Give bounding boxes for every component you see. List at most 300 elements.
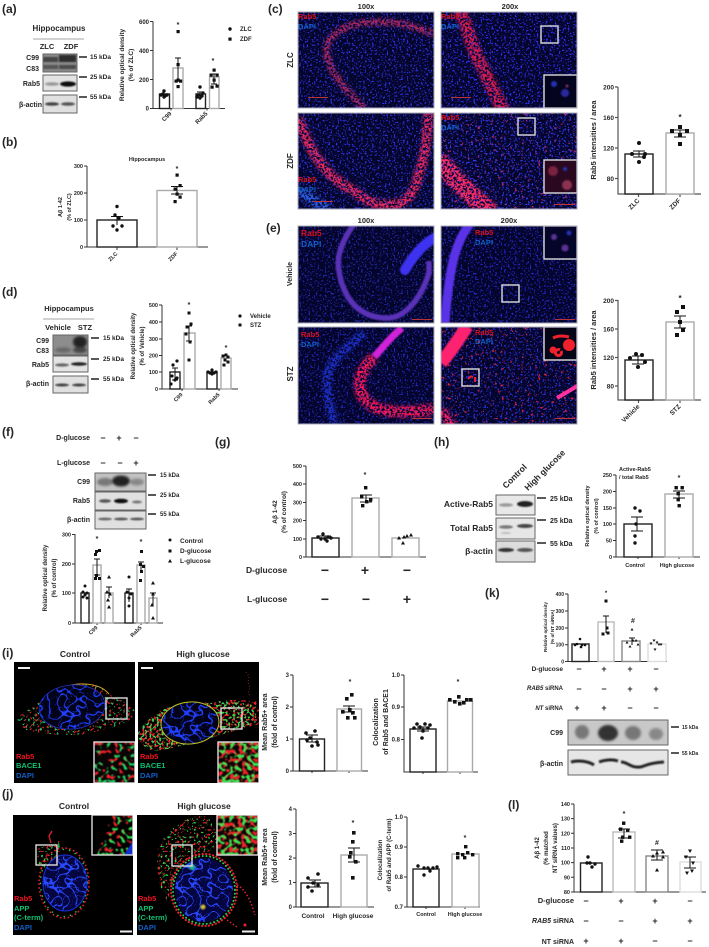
treatment rows l: − [583, 916, 589, 926]
treatment rows g: − [321, 591, 329, 607]
treatment rows k: − [627, 703, 633, 713]
bar chart e: Rab5 intensities / area [589, 310, 598, 390]
treatment rows k: − [601, 684, 607, 694]
bar chart h: Active-Rab5 [619, 467, 651, 473]
panel: g [215, 435, 426, 607]
bar chart l: 120 [561, 831, 570, 837]
bar chart k [543, 591, 667, 666]
bar chart i mean area: * [349, 679, 352, 686]
treatment rows l: + [652, 896, 658, 906]
treatment rows l: + [583, 936, 589, 946]
bar chart k: * [605, 591, 608, 597]
western blot d: Vehicle [45, 323, 71, 332]
bar chart d: C99 [173, 392, 184, 404]
bar chart f: Relative optical density [43, 544, 49, 611]
image labels [298, 12, 577, 209]
western blot d: 55 kDa [103, 376, 124, 383]
western blot h: 55 kDa [550, 541, 573, 548]
treatment rows f: L-glucose [57, 460, 90, 467]
western blot k: 15 kDa [682, 725, 698, 731]
legend a [228, 27, 252, 43]
bar chart i mean area: (fold of control) [272, 696, 279, 748]
micrograph i high glucose: DAPI [140, 771, 158, 780]
treatment rows l: D-glucose [538, 896, 574, 905]
micrograph j high glucose [137, 815, 258, 935]
bar chart c: 80 [607, 176, 614, 183]
bar chart i colocalization: of Rab5 and BACE1 [383, 689, 390, 755]
treatment rows l: + [618, 936, 624, 946]
treatment rows k: RAB5 siRNA [527, 686, 564, 692]
panel: a [2, 2, 252, 126]
image labels: DAPI [298, 185, 316, 194]
legend f: Control [180, 538, 203, 545]
legend a: ZDF [240, 37, 252, 43]
micrograph ZLC 200x [442, 12, 576, 108]
bar chart l: 130 [561, 817, 570, 823]
bar chart e: Vehicle [621, 403, 642, 424]
bar chart j mean area: 0 [289, 905, 293, 911]
image labels: Rab5 [441, 113, 459, 122]
micrograph j control: (C-term) [14, 913, 44, 922]
bar chart l: NT siRNA values) [553, 823, 559, 873]
bar chart h: (% of control) [594, 498, 600, 534]
bar chart i mean area: Mean Rab5+ area [262, 693, 269, 751]
heading Control: Control [59, 801, 89, 811]
treatment rows k: D-glucose [532, 666, 563, 673]
micrograph i control: DAPI [16, 771, 34, 780]
bar chart h: 0 [609, 555, 612, 561]
panel: j [2, 787, 482, 935]
legend d: STZ [250, 323, 262, 329]
micrograph i control [14, 662, 135, 783]
image labels: DAPI [475, 238, 493, 247]
micrograph j control [13, 815, 133, 935]
treatment rows f: − [117, 458, 123, 468]
bar chart k: 200 [556, 626, 564, 632]
bar chart i mean area: 0 [286, 769, 290, 775]
bar chart f: 0 [68, 621, 71, 627]
micrograph j control: Rab5 [14, 894, 32, 903]
label e: (e) [266, 221, 281, 235]
western blot h: 25 kDa [550, 496, 573, 503]
label g: (g) [215, 435, 230, 449]
bar chart c [589, 84, 701, 211]
micrograph i high glucose [138, 662, 259, 783]
bar chart k: # [631, 618, 635, 625]
western blot h: 25 kDa [550, 518, 573, 525]
bar chart b [58, 164, 208, 263]
bar chart d: 400 [149, 320, 158, 326]
column heading 100x: 100x [358, 216, 375, 225]
bar chart g: 400 [293, 482, 302, 488]
western blot a: 25 kDa [90, 74, 111, 81]
western blot h: Active-Rab5 [444, 499, 493, 509]
treatment rows l: NT siRNA [542, 939, 574, 946]
western blot a: 15 kDa [90, 54, 111, 61]
bar chart f: 100 [62, 591, 71, 597]
label l: (l) [508, 798, 519, 812]
micrograph i high glucose: BACE1 [140, 761, 165, 770]
bar chart i mean area [262, 673, 368, 775]
bar chart e: STZ [669, 403, 682, 417]
bar chart b: 0 [80, 245, 83, 251]
bar chart d: 0 [155, 387, 158, 393]
western blot f: C99 [77, 479, 90, 486]
bar chart h: 150 [603, 506, 612, 512]
bar chart k: (% of NT siRNA) [550, 609, 555, 644]
bar chart i mean area: 2 [286, 705, 290, 711]
bar chart e: 80 [607, 384, 614, 390]
western blot h [444, 447, 573, 562]
western blot a: ZDF [64, 42, 79, 51]
bar chart a: 0 [146, 106, 150, 112]
bar chart d: (% of Vehicle) [140, 326, 146, 366]
bar chart h: / total Rab5 [619, 475, 649, 481]
bar chart a: C99 [161, 111, 174, 123]
treatment rows l: + [652, 916, 658, 926]
bar chart j colocalization: Colocalization [378, 839, 384, 880]
micrograph j high glucose: DAPI [138, 923, 156, 932]
bar chart f [43, 532, 163, 639]
bar chart b: 100 [74, 218, 83, 224]
treatment rows k: − [653, 703, 659, 713]
bar chart j mean area: 2 [289, 856, 293, 862]
bar chart i mean area: 1 [286, 737, 290, 743]
bar chart h: 250 [603, 473, 612, 479]
bar chart i colocalization: 0.8 [392, 738, 401, 744]
bar chart j colocalization: of Rab5 and APP (C-term) [387, 818, 393, 892]
bar chart a: * [177, 22, 180, 29]
label c: (c) [268, 2, 283, 16]
micrograph j high glucose: APP [138, 904, 153, 913]
bar chart j mean area: 4 [289, 807, 293, 813]
bar chart b: Aβ 1-42 [58, 197, 64, 217]
bar chart i mean area: 3 [286, 673, 290, 679]
treatment rows f: D-glucose [56, 435, 90, 442]
western blot d: C99 [36, 338, 49, 345]
micrograph Vehicle 100x [298, 226, 434, 322]
treatment rows k: + [601, 703, 607, 713]
bar chart g: (% of control) [281, 491, 288, 533]
bar chart f: (% of control) [52, 559, 58, 597]
bar chart a: Relative optical density [119, 28, 126, 101]
image labels: Rab5 [475, 228, 493, 237]
label i: (i) [2, 646, 13, 660]
bar chart d: Relative optical density [131, 312, 137, 379]
bar chart f: Rab5 [130, 625, 143, 639]
treatment rows k: − [576, 684, 582, 694]
panel: k [485, 586, 698, 775]
bar chart c: 120 [603, 146, 614, 152]
western blot k [540, 720, 698, 775]
column heading 200x: 200x [502, 2, 519, 11]
bar chart i colocalization: * [457, 679, 460, 686]
image labels: DAPI [298, 22, 316, 31]
bar chart j mean area: High glucose [333, 913, 374, 920]
treatment rows l: + [618, 896, 624, 906]
micrograph Vehicle 200x [442, 226, 576, 322]
western blot f: 25 kDa [160, 493, 180, 499]
bar chart i colocalization: 1.0 [392, 673, 401, 679]
bar chart g [272, 464, 426, 561]
bar chart d: Rab5 [208, 392, 221, 406]
bar chart a: 200 [139, 78, 150, 84]
treatment rows g: − [403, 562, 411, 578]
bar chart d: 100 [149, 370, 158, 376]
treatment rows k: + [601, 664, 607, 674]
bar chart h: Relative optical density [585, 484, 591, 547]
micrograph ZDF 200x [442, 114, 576, 208]
micrograph i high glucose: Rab5 [140, 752, 158, 761]
bar chart j colocalization: Control [416, 912, 436, 918]
bar chart b: 200 [74, 191, 83, 197]
western blot f: 55 kDa [160, 512, 180, 518]
bar chart c: Rab5 intensities / area [589, 100, 598, 180]
bar chart l: 90 [564, 875, 570, 881]
micrograph j high glucose: (C-term) [138, 913, 168, 922]
bar chart k: Relative optical density [543, 602, 548, 652]
bar chart j mean area: 1 [289, 880, 293, 886]
treatment rows f: − [100, 458, 106, 468]
western blot d: β-actin [26, 381, 49, 388]
bar chart l: 80 [564, 890, 570, 896]
panel: b [2, 135, 208, 263]
heading Control: Control [60, 649, 90, 659]
image labels: DAPI [301, 239, 321, 249]
bar chart a: 400 [139, 49, 150, 55]
bar chart j mean area: (fold of control) [272, 831, 279, 883]
western blot a: 55 kDa [90, 94, 111, 101]
treatment rows k: + [627, 684, 633, 694]
western blot d [26, 304, 124, 393]
western blot a: Hippocampus [33, 24, 86, 33]
treatment rows g: − [321, 562, 329, 578]
treatment rows g: D-glucose [246, 565, 287, 575]
bar chart h: 100 [603, 522, 612, 528]
image labels: DAPI [441, 22, 459, 31]
treatment rows f: + [116, 433, 122, 443]
bar chart i colocalization: 0.9 [392, 705, 401, 711]
bar chart b: ZDF [168, 251, 180, 263]
bar chart g: 200 [293, 518, 302, 524]
bar chart f: 300 [62, 532, 71, 538]
micrograph j control: DAPI [14, 923, 32, 932]
bar chart a [119, 20, 225, 126]
western blot d: 15 kDa [103, 335, 124, 342]
panel: h [434, 435, 700, 569]
image labels: DAPI [441, 123, 459, 132]
bar chart e: * [678, 294, 682, 303]
treatment rows f: − [100, 433, 106, 443]
bar chart e: 160 [603, 326, 614, 334]
heading High glucose: High glucose [177, 801, 231, 811]
bar chart j colocalization: High glucose [448, 912, 482, 918]
bar chart l: # [655, 840, 659, 847]
image labels: Rab5 [298, 12, 316, 21]
bar chart f: C99 [88, 625, 99, 637]
bar chart h: Control [625, 563, 645, 569]
row label STZ: STZ [286, 366, 295, 382]
image labels: Rab5 [298, 175, 316, 184]
bar chart e [589, 294, 701, 424]
treatment rows l: − [618, 916, 624, 926]
image labels: Rab5 [301, 330, 319, 339]
label a: (a) [2, 2, 17, 16]
bar chart l: 100 [561, 861, 570, 867]
bar chart a: Rab5 [195, 111, 210, 126]
western blot d: Hippocampus [44, 304, 94, 313]
image labels: DAPI [475, 337, 493, 346]
bar chart h: 200 [603, 490, 612, 496]
treatment rows g: L-glucose [247, 594, 287, 604]
western blot a: C83 [26, 66, 39, 73]
bar chart l: Aβ 1-42 [535, 837, 541, 859]
bar chart k: 0 [561, 660, 564, 666]
image labels: Rab5 [475, 328, 493, 337]
bar chart d: 300 [149, 337, 158, 343]
bar chart l: * [623, 811, 626, 818]
bar chart c: 160 [603, 115, 614, 122]
label d: (d) [2, 285, 17, 299]
bar chart j mean area: Control [301, 913, 325, 920]
western blot k: β-actin [540, 761, 563, 768]
bar chart k: 100 [556, 643, 564, 649]
bar chart d [131, 302, 238, 406]
bar chart g: 0 [299, 555, 302, 561]
treatment rows g: + [403, 591, 411, 607]
treatment rows k: + [653, 684, 659, 694]
western blot a: Rab5 [23, 81, 40, 88]
treatment rows l: − [652, 936, 658, 946]
micrograph i control: Rab5 [16, 752, 34, 761]
micrograph ZLC 100x [298, 12, 434, 108]
label j: (j) [2, 787, 13, 801]
western blot f: Rab5 [73, 498, 90, 505]
bar chart k: 300 [556, 609, 564, 615]
western blot d: C83 [36, 348, 49, 355]
bar chart f: * [140, 539, 143, 546]
treatment rows k: + [574, 703, 580, 713]
label h: (h) [434, 435, 449, 449]
legend f: D-glucose [180, 548, 212, 555]
bar chart d: 200 [149, 354, 158, 360]
label b: (b) [2, 135, 17, 149]
treatment rows f [56, 433, 139, 468]
legend d [238, 314, 271, 329]
treatment rows l: RAB5 siRNA [532, 918, 574, 925]
legend a: ZLC [240, 27, 252, 33]
bar chart i colocalization: Colocalization [373, 698, 380, 746]
image labels: DAPI [301, 340, 319, 349]
bar chart c: ZDF [669, 197, 682, 211]
bar chart b: (% of ZLC) [67, 193, 73, 221]
image labels: Rab5 [301, 228, 322, 238]
treatment rows k [527, 664, 659, 713]
western blot d: 25 kDa [103, 356, 124, 363]
row label ZLC: ZLC [286, 52, 295, 68]
bar chart j mean area: Mean Rab5+ area [262, 828, 269, 886]
western blot a: C99 [26, 55, 39, 62]
bar chart j colocalization [378, 815, 482, 918]
bar chart g: 500 [293, 464, 302, 470]
treatment rows l [532, 896, 693, 946]
bar chart l: 140 [561, 802, 570, 808]
label f: (f) [2, 425, 14, 439]
treatment rows l: − [687, 936, 693, 946]
treatment rows f: + [133, 458, 139, 468]
column heading 100x: 100x [358, 2, 375, 11]
western blot f: β-actin [67, 517, 90, 524]
treatment rows l: + [687, 916, 693, 926]
row label Vehicle: Vehicle [287, 262, 294, 286]
western blot f [67, 473, 180, 529]
bar chart h: High glucose [660, 563, 694, 569]
micrograph j high glucose: Rab5 [138, 894, 156, 903]
bar chart i colocalization [373, 673, 478, 774]
bar chart k: 400 [556, 592, 564, 598]
bar chart j mean area: 3 [289, 832, 293, 838]
bar chart j mean area [262, 807, 374, 920]
western blot f: 15 kDa [160, 473, 180, 479]
bar chart g: * [364, 472, 367, 479]
label k: (k) [485, 586, 500, 600]
bar chart c: ZLC [628, 197, 642, 211]
bar chart j colocalization: 0.8 [395, 875, 404, 881]
bar chart g: 300 [293, 500, 302, 506]
panel: d [2, 285, 271, 406]
treatment rows f: − [133, 433, 139, 443]
treatment rows g: + [361, 562, 369, 578]
bar chart l [535, 802, 706, 896]
column heading 200x: 200x [501, 216, 518, 225]
bar chart f: 200 [62, 562, 71, 568]
micrograph STZ 100x [298, 328, 434, 424]
image labels [298, 226, 577, 424]
treatment rows k: + [627, 664, 633, 674]
western blot k: 55 kDa [682, 751, 698, 757]
bar chart c: * [678, 113, 682, 122]
bar chart b: ZLC [108, 251, 119, 263]
panel: e [266, 216, 701, 427]
treatment rows g [246, 562, 411, 607]
bar chart e: 120 [603, 355, 614, 362]
title b: Hippocampus [129, 157, 165, 163]
micrograph ZDF 100x [298, 114, 434, 208]
legend f [168, 538, 212, 565]
bar chart h: 50 [606, 538, 612, 544]
bar chart l: (% matched [544, 831, 550, 865]
western blot d: STZ [78, 323, 92, 332]
treatment rows l: − [583, 896, 589, 906]
bar chart a: (% of ZLC) [128, 49, 135, 81]
bar chart b: * [176, 166, 179, 173]
western blot a: ZLC [40, 42, 55, 51]
bar chart g: 100 [293, 537, 302, 543]
bar chart j colocalization: 1.0 [395, 815, 404, 821]
bar chart d: 500 [149, 303, 158, 309]
panel: l [508, 798, 706, 946]
bar chart e: 200 [603, 298, 614, 305]
bar chart j mean area: * [352, 820, 355, 827]
bar chart f: * [96, 536, 99, 543]
western blot h: β-actin [465, 546, 493, 556]
western blot k: C99 [550, 730, 563, 737]
western blot h: Control [500, 462, 529, 490]
image labels: Rab5 [441, 12, 459, 21]
panel: c [268, 2, 701, 213]
bar chart d: * [188, 302, 191, 309]
micrograph STZ 200x [442, 328, 576, 424]
